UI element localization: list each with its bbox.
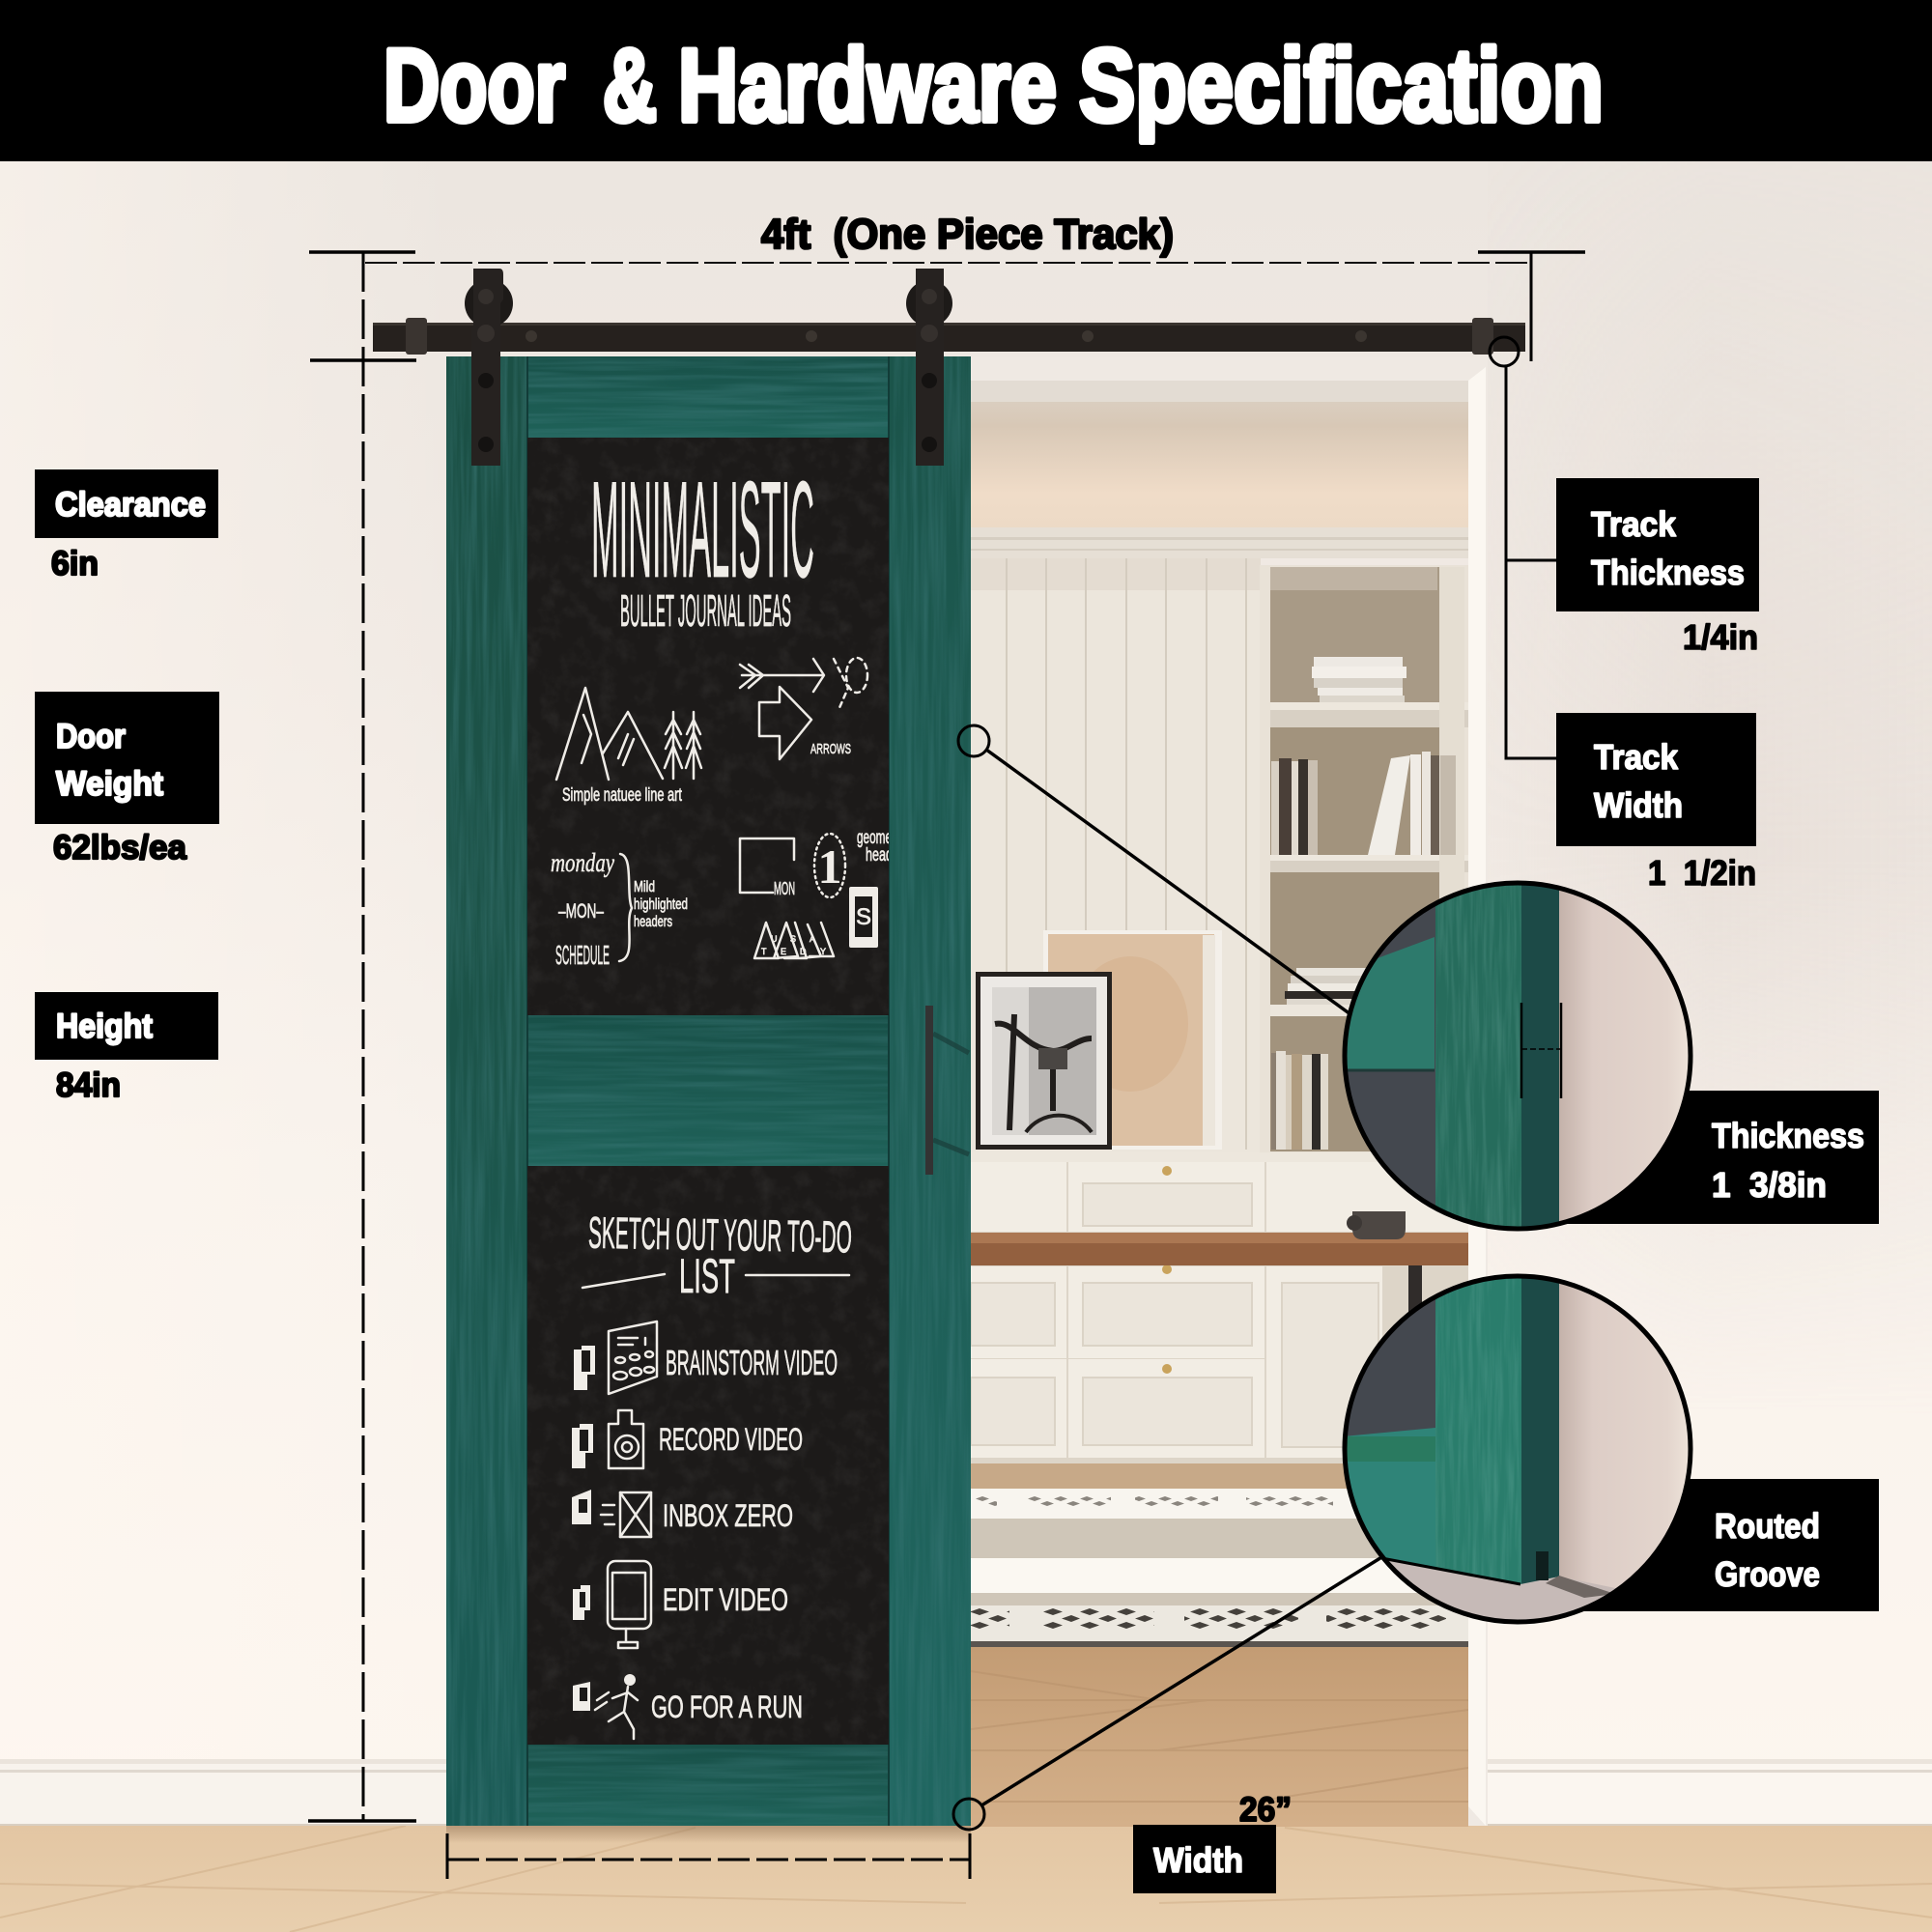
title: &: [603, 27, 657, 143]
text: MINIMALISTIC: [591, 453, 814, 607]
bottom rail: [527, 1745, 889, 1826]
left hanger: [465, 269, 513, 466]
books bottom shelf: [1271, 1051, 1328, 1150]
barn door: [446, 356, 971, 1826]
track width label: Track: [1594, 737, 1679, 777]
door weight label: Door: [56, 718, 126, 755]
baseboard left: [0, 1759, 446, 1826]
door weight label: Weight: [56, 765, 163, 803]
door weight label: [35, 692, 219, 867]
track thickness label: Track: [1591, 504, 1677, 544]
chalk script monday: monday: [551, 848, 614, 877]
track thickness label: Thickness: [1591, 553, 1745, 592]
routed groove leader line: [953, 1556, 1383, 1830]
chalk arrow: [740, 659, 824, 692]
height label: [35, 992, 218, 1104]
chalk tuesday banner: D: [800, 947, 807, 956]
title bar: [0, 0, 1932, 161]
track width value: 1 1/2in: [1648, 853, 1756, 893]
track thickness label: [1556, 478, 1759, 657]
chalk to-do: edit: [573, 1561, 788, 1648]
routed groove label: [1546, 1479, 1879, 1611]
books top shelf: [1312, 657, 1406, 702]
large art print: [1043, 930, 1222, 1150]
clearance label: [35, 469, 218, 582]
track thickness value: 1/4in: [1683, 617, 1758, 657]
height value: 84in: [56, 1066, 121, 1104]
routed groove label: Routed: [1715, 1506, 1820, 1546]
thickness marks: [1521, 1003, 1561, 1098]
track end bracket left: [406, 318, 427, 355]
middle rail: [527, 1015, 889, 1166]
door casing right: [971, 357, 1488, 1826]
clearance value: 6in: [51, 545, 99, 582]
track length label: 4ft (One Piece Track): [761, 211, 1174, 258]
width label: Width: [1153, 1840, 1243, 1880]
chalk brace: [619, 854, 632, 961]
room seen through doorway: [971, 381, 1468, 1827]
barn door track: [373, 318, 1525, 355]
track width label: Width: [1594, 785, 1683, 825]
zoomed door edge: [1521, 882, 1559, 1230]
floor: [0, 1826, 1932, 1932]
chalk to-do: run: [573, 1674, 803, 1739]
zoomed stile: [1435, 882, 1521, 1230]
track width label: [1556, 713, 1756, 893]
chalk S badge: [849, 887, 878, 948]
wooden table with bowl: [971, 1211, 1468, 1314]
chalk mild highlighted headers: headers: [634, 914, 672, 930]
chalk mild highlighted headers: Mild: [634, 879, 655, 895]
height label: Height: [56, 1008, 153, 1045]
clearance label: Clearance: [55, 486, 206, 524]
width label: [1133, 1825, 1276, 1893]
chalk number badge: 1: [817, 839, 842, 894]
chalk mon label: MON: [774, 879, 795, 898]
title: [384, 27, 1604, 143]
title: Specification: [1079, 27, 1604, 143]
chalk dashed loop: [834, 658, 867, 710]
chalk to-do: inbox: INBOX ZERO: [663, 1498, 793, 1533]
chalk to-do: brainstorm: [574, 1321, 838, 1394]
stile seams: [527, 356, 889, 1826]
right hanger: [906, 269, 952, 466]
chalk rectangle header: [740, 838, 794, 893]
room floor strip: [971, 1463, 1347, 1489]
chalk to-do: edit: EDIT VIDEO: [663, 1582, 788, 1617]
thickness label: 1 3/8in: [1712, 1165, 1827, 1205]
zoomed bottom rail: [1344, 1428, 1435, 1570]
chalk tuesday banner: A: [810, 934, 815, 944]
framed bicycle photograph: [976, 972, 1112, 1150]
thickness leader line: [958, 725, 1350, 1014]
width dimension line: [447, 1833, 970, 1879]
width value: 26”: [1239, 1791, 1292, 1829]
chalk to-do: run: GO FOR A RUN: [651, 1690, 803, 1724]
chalk mountains: [556, 688, 663, 780]
panelled wall: [971, 558, 1261, 1157]
thickness label: [1546, 1091, 1879, 1224]
zoomed door edge: [1521, 1275, 1559, 1589]
chalk underlines: [582, 1274, 849, 1288]
zoomed wall: [1559, 882, 1694, 1230]
height dimension line: [361, 252, 365, 1821]
chalk tuesday banner: E: [781, 947, 786, 956]
chalk arrow caption: ARROWS: [810, 741, 851, 757]
chalk nature caption: Simple natuee line art: [562, 785, 682, 806]
ceiling: [971, 402, 1468, 527]
chalk geometric heading: [857, 828, 893, 866]
chalk tuesday banner: Y: [820, 947, 826, 956]
chalk to-do: record: RECORD VIDEO: [659, 1422, 803, 1457]
books lower shelf: [1285, 968, 1366, 1005]
chalk to-do: inbox: [572, 1490, 793, 1537]
chalk tuesday banner: U: [771, 934, 777, 944]
thickness label: Thickness: [1712, 1116, 1864, 1155]
patterned rug: [971, 1489, 1468, 1647]
chalk block arrow: [759, 687, 811, 759]
lower chalkboard panel: BRAINSTORM VIDEO: [666, 1343, 838, 1382]
upper chalkboard panel: [527, 438, 893, 1015]
chalk pine trees: [665, 712, 701, 779]
right stile: [889, 356, 971, 1826]
chalk S badge: S: [856, 904, 871, 930]
routed groove label: Groove: [1715, 1554, 1820, 1594]
chalk tuesday banner: T: [761, 947, 767, 956]
upper chalkboard panel: SCHEDULE: [555, 940, 610, 970]
chalk geometric heading: head: [866, 845, 893, 866]
track bolts: [526, 330, 1367, 342]
upper chalkboard panel: BULLET JOURNAL IDEAS: [620, 585, 791, 636]
chalk geometric heading: geome: [857, 828, 892, 848]
chalk mild highlighted headers: [634, 879, 688, 930]
track end bracket right: [1472, 318, 1493, 355]
room parquet floor: [971, 1647, 1468, 1827]
cabinet fronts: [971, 1152, 1468, 1466]
baseboard right: [1488, 1759, 1932, 1826]
lower chalkboard panel: [527, 1166, 889, 1745]
chalk number badge: [814, 834, 845, 897]
zoomed rail: [1344, 937, 1435, 1070]
door weight value: 62lbs/ea: [53, 829, 187, 867]
title: Hardware: [678, 27, 1057, 143]
zoomed stile: [1435, 1275, 1521, 1589]
chalk to-do: record: [572, 1410, 803, 1468]
zoomed floor: [1344, 1551, 1690, 1633]
routed groove notch: [1536, 1551, 1548, 1580]
chalk tuesday banner: [754, 923, 834, 958]
top rail: [527, 356, 889, 438]
left stile: [446, 356, 527, 1826]
detail circle: routed groove: [1344, 1275, 1694, 1633]
handle: [925, 1006, 969, 1175]
lower chalkboard panel: SKETCH OUT YOUR TO-DO: [588, 1208, 852, 1262]
chalk mon: –MON–: [558, 900, 604, 923]
bookcase: [1260, 565, 1468, 1156]
zoomed wall: [1559, 1275, 1694, 1623]
title: Door: [384, 27, 565, 143]
detail circle: door thickness: [1344, 882, 1694, 1230]
chalk mild highlighted headers: highlighted: [634, 896, 688, 913]
crown moulding: [971, 527, 1468, 558]
chalk heading: list: LIST: [679, 1249, 735, 1303]
track leader lines: [1490, 337, 1556, 758]
books middle shelf: [1271, 752, 1456, 855]
chalk tuesday banner: S: [790, 934, 796, 944]
